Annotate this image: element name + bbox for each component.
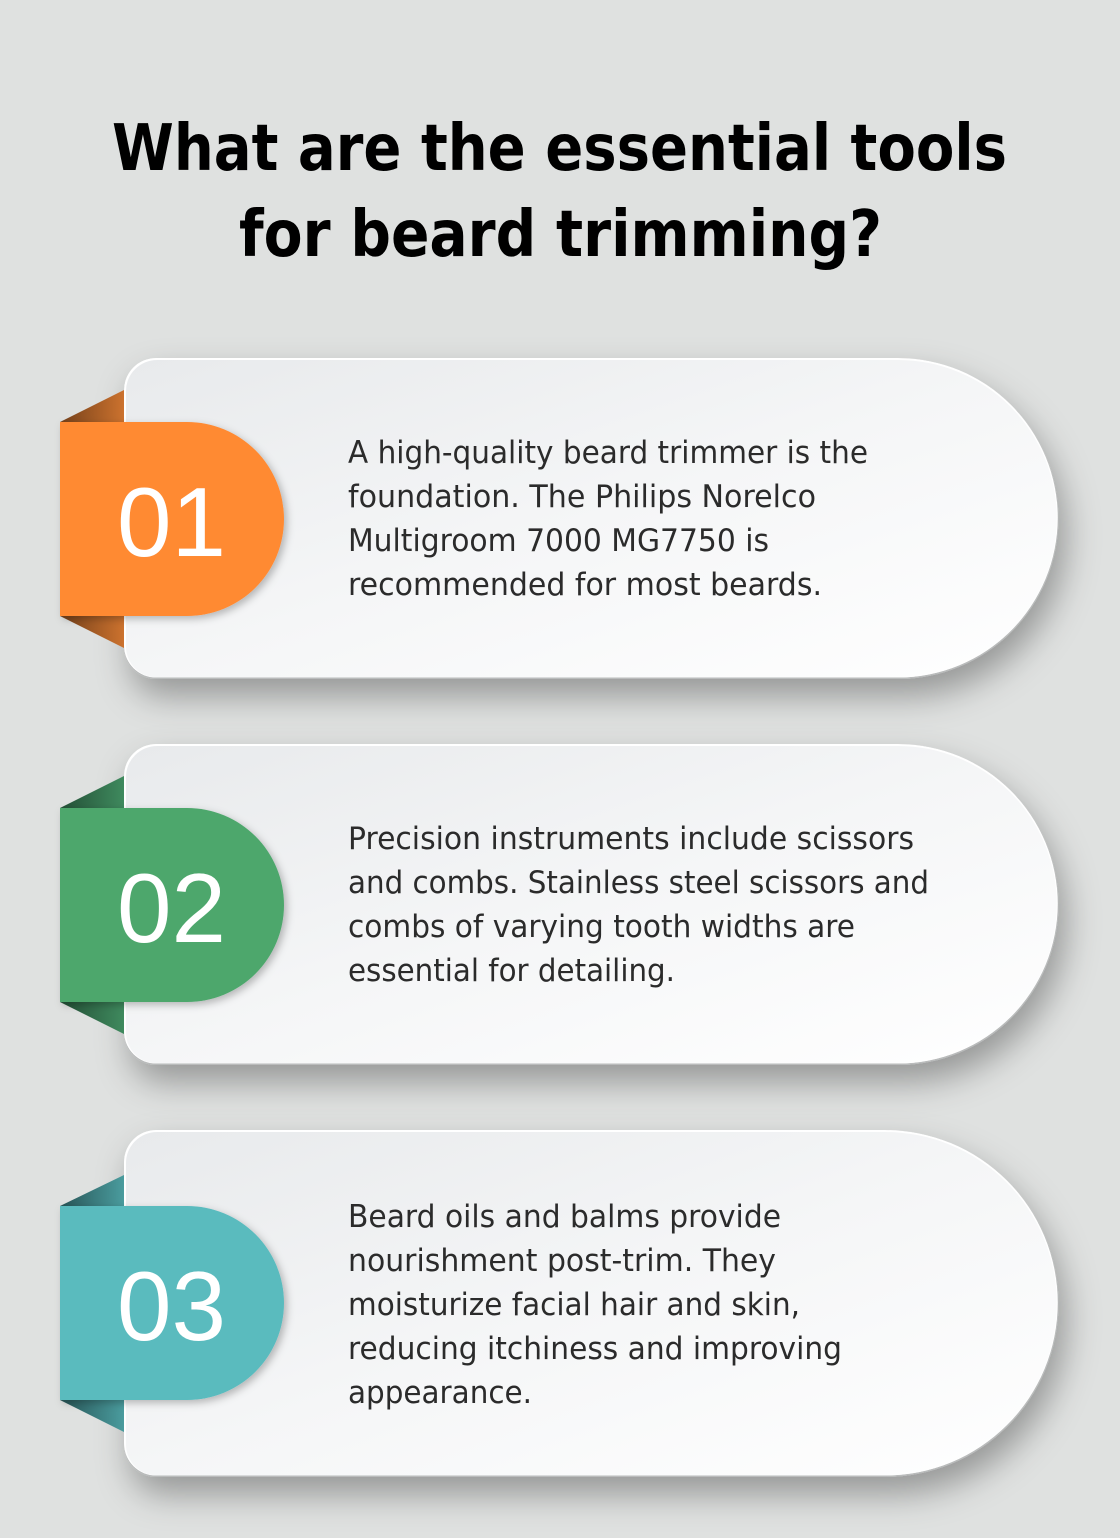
text block	[348, 821, 929, 989]
fold: top	[60, 1175, 124, 1206]
title: What are the essential tools	[112, 112, 1007, 186]
fold: bottom	[60, 1002, 124, 1034]
text block: nourishment post-trim. They	[348, 1243, 776, 1279]
number badge	[60, 808, 284, 1002]
number: 03	[117, 1251, 226, 1361]
fold: bottom	[60, 616, 124, 648]
text block: reducing itchiness and improving	[348, 1331, 842, 1367]
text block: foundation. The Philips Norelco	[348, 479, 816, 515]
panel: step 02	[60, 744, 1058, 1065]
fold: top	[60, 776, 124, 808]
text block: appearance.	[348, 1375, 532, 1411]
card 02	[124, 744, 1058, 1065]
text block: combs of varying tooth widths are	[348, 909, 855, 945]
title: for beard trimming?	[239, 198, 882, 272]
title	[112, 112, 1007, 272]
text block: recommended for most beards.	[348, 567, 822, 603]
number badge	[60, 1206, 284, 1400]
number: 01	[117, 467, 226, 577]
number: 02	[117, 853, 226, 963]
text block: A high-quality beard trimmer is the	[348, 435, 868, 471]
number badge	[60, 422, 284, 616]
text block: and combs. Stainless steel scissors and	[348, 865, 929, 901]
card 01	[124, 358, 1058, 679]
text block: moisturize facial hair and skin,	[348, 1287, 800, 1323]
text block: Multigroom 7000 MG7750 is	[348, 523, 769, 559]
card 03	[124, 1130, 1058, 1477]
fold: bottom	[60, 1400, 124, 1432]
text block: essential for detailing.	[348, 953, 675, 989]
text block: Beard oils and balms provide	[348, 1199, 781, 1235]
panel: step 03	[60, 1130, 1058, 1477]
text block	[348, 435, 868, 603]
fold: top	[60, 390, 124, 422]
text block	[348, 1199, 842, 1411]
text block: Precision instruments include scissors	[348, 821, 914, 857]
panel: step 01	[60, 358, 1058, 679]
